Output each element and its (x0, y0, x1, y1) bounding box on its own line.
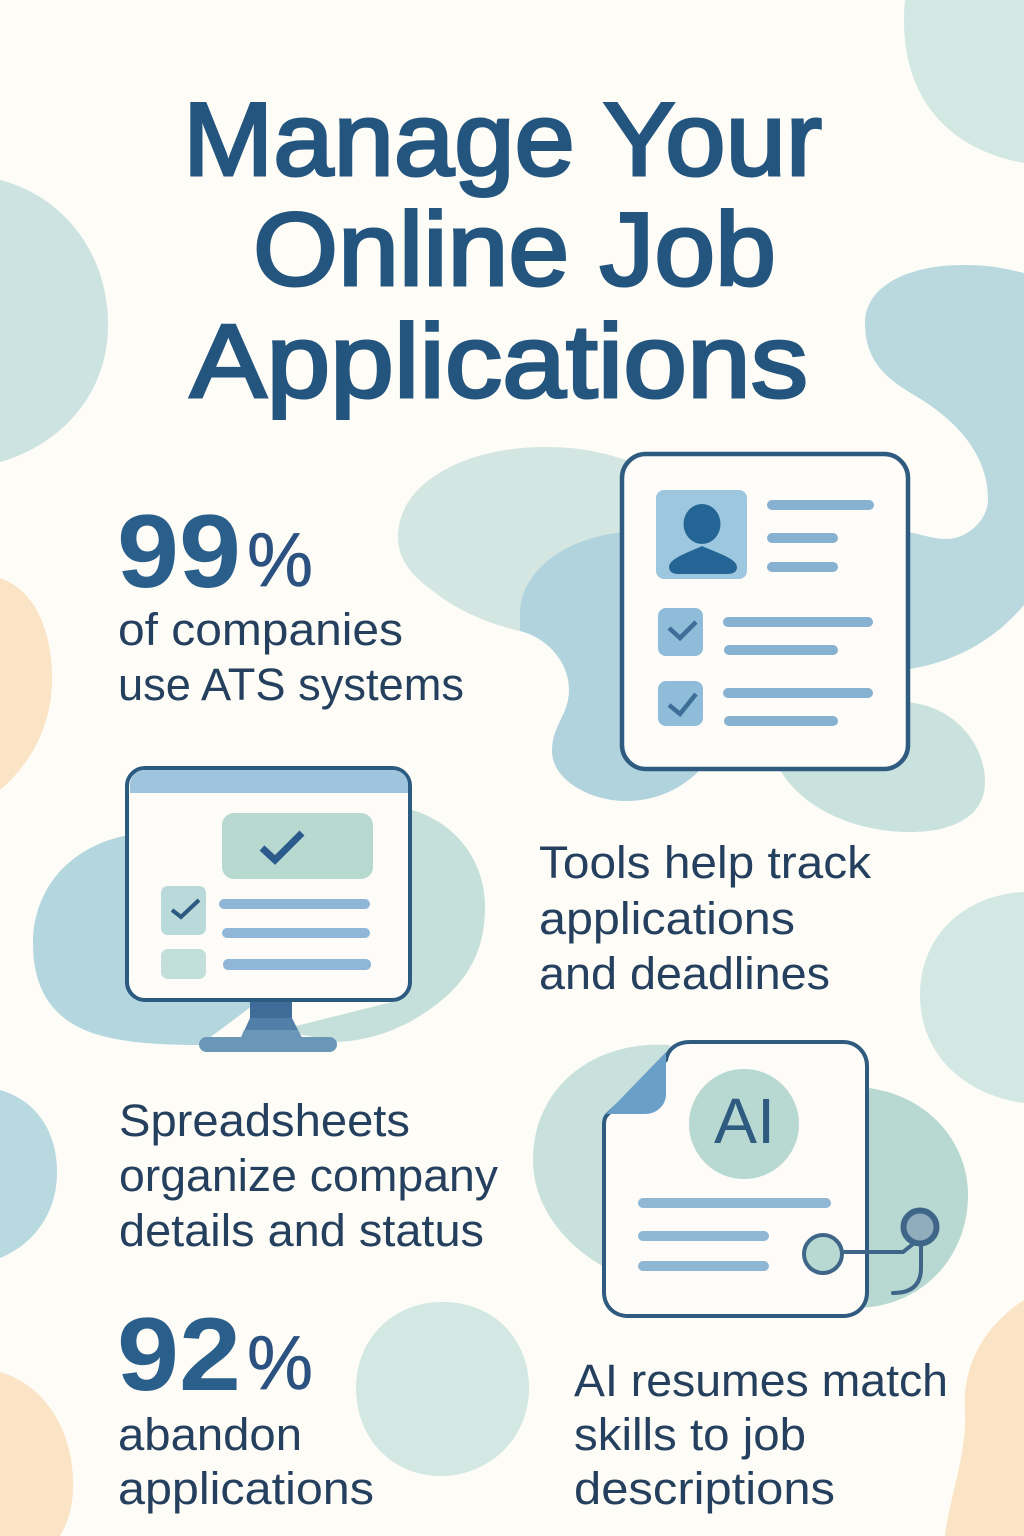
AI badge (689, 1069, 799, 1179)
confirmation box (222, 813, 373, 879)
stat: 92% abandon applications: applications (118, 1463, 374, 1514)
icon: desktop monitor (127, 768, 410, 1052)
stat: 99% of companies use ATS systems: of companies (118, 604, 403, 655)
title: Applications (190, 304, 808, 420)
stat: 92% abandon applications: 92 (117, 1297, 241, 1413)
stat: 99% of companies use ATS systems: 99 (117, 494, 241, 610)
stat: 99% of companies use ATS systems: % (247, 518, 313, 603)
title: Manage Your (183, 82, 822, 198)
connector nodes (804, 1210, 936, 1293)
caption: AI resumes: skills to job (574, 1409, 806, 1460)
caption: AI resumes (574, 1355, 948, 1514)
title (183, 82, 822, 420)
profile photo (656, 490, 747, 579)
stat: 92% abandon applications: abandon (118, 1409, 302, 1460)
caption: tools: Tools help track (539, 837, 872, 888)
browser header bar (130, 770, 408, 793)
document text lines (638, 1198, 831, 1271)
caption: AI resumes: AI resumes match (574, 1355, 948, 1406)
monitor stand (199, 998, 337, 1052)
stat: 92% abandon applications (117, 1297, 374, 1514)
caption: spreadsheets (119, 1095, 499, 1256)
AI badge: AI (714, 1085, 775, 1157)
folded corner (606, 1052, 666, 1114)
title: Online Job (253, 192, 776, 308)
icon: resume document (622, 454, 908, 769)
caption: tools: and deadlines (539, 948, 830, 999)
checked row (161, 886, 370, 938)
stat: 99% of companies use ATS systems: use ATS systems (118, 659, 464, 710)
unchecked row (161, 949, 371, 979)
stat: 92% abandon applications: % (247, 1321, 313, 1406)
caption: tools (539, 837, 872, 999)
checklist item 1 (658, 608, 873, 656)
caption: AI resumes: descriptions (574, 1463, 835, 1514)
caption: spreadsheets: details and status (119, 1205, 484, 1256)
checklist item 2 (658, 681, 873, 726)
caption: tools: applications (539, 893, 795, 944)
caption: spreadsheets: Spreadsheets (119, 1095, 410, 1146)
profile text lines (767, 500, 874, 572)
stat: 99% of companies use ATS systems (117, 494, 464, 710)
icon: AI resume document (604, 1042, 936, 1316)
caption: spreadsheets: organize company (119, 1150, 499, 1201)
